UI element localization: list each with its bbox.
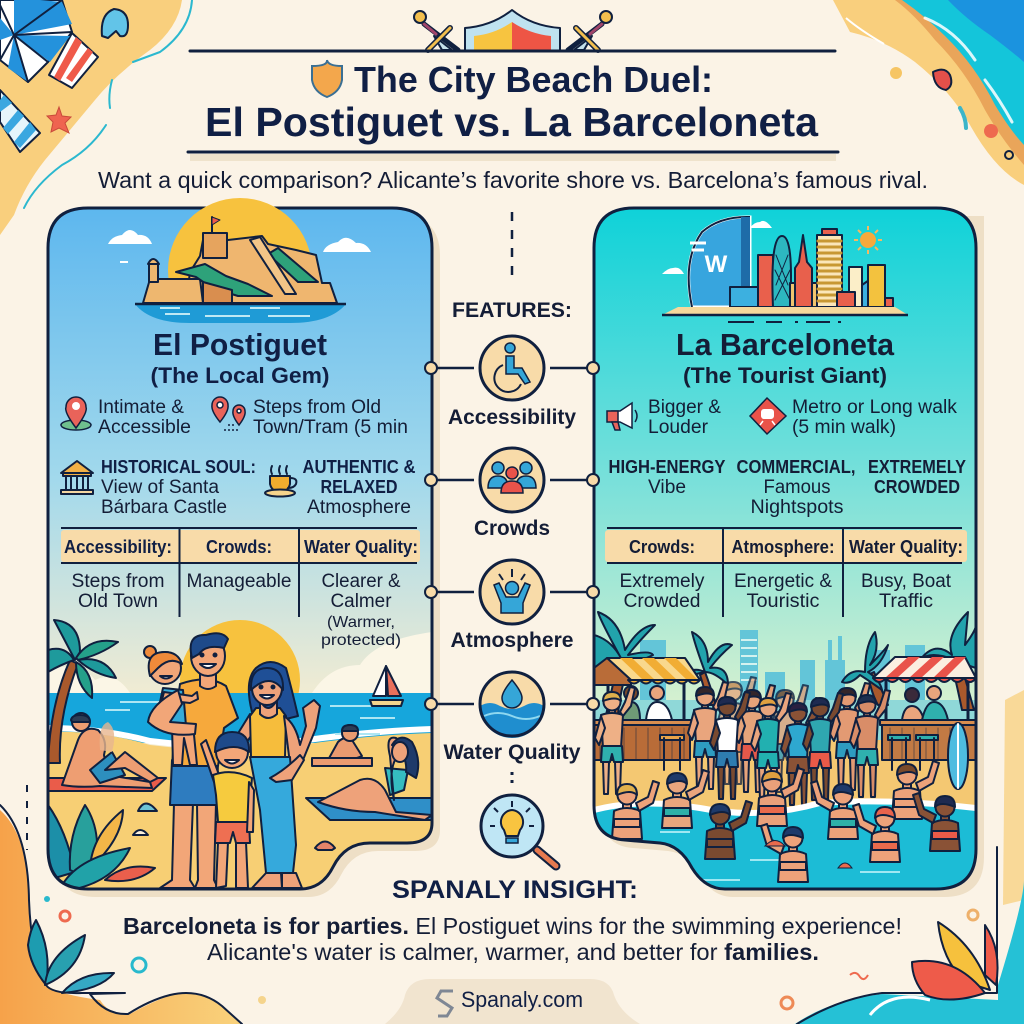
swimmers — [612, 761, 960, 882]
beach bar left — [594, 658, 700, 770]
feature: steps from old town: Town/Tram (5 min — [253, 417, 408, 438]
water and foam — [596, 804, 974, 888]
starfish — [47, 107, 71, 133]
icon: wheelchair — [480, 336, 544, 400]
table: El Postiguet facts: protected) — [321, 632, 401, 649]
decoration: top-left beach corner — [0, 0, 192, 235]
panel outline — [48, 208, 432, 889]
feature: high energy — [608, 456, 726, 498]
icon: small shield — [312, 60, 342, 97]
feature: accessibility: Accessibility — [448, 406, 576, 429]
father — [160, 633, 238, 888]
feature: high energy: Vibe — [648, 477, 686, 498]
table: El Postiguet facts: Old Town — [78, 591, 158, 612]
insight text: Alicante's water is calmer, warmer, and better for families. — [207, 939, 819, 965]
corner leaves — [28, 920, 48, 985]
feature: authentic and relaxed: RELAXED — [320, 476, 398, 497]
castle illustration — [108, 198, 371, 323]
umbrella — [0, 0, 72, 82]
title rule bottom — [188, 152, 838, 161]
panel outline — [594, 208, 976, 889]
sand — [596, 740, 974, 810]
panel heading: El Postiguet — [153, 327, 327, 362]
feature: steps from old town — [212, 397, 408, 438]
feature: commercial — [736, 456, 856, 518]
connectors — [425, 362, 599, 710]
sitting man right — [312, 725, 372, 766]
feature: crowds: Crowds — [474, 517, 550, 540]
table: La Barceloneta facts: Traffic — [879, 591, 933, 612]
feature: crowds — [474, 448, 550, 540]
panel heading — [150, 327, 330, 388]
panel heading: (The Local Gem) — [150, 363, 330, 388]
icon: temple — [61, 461, 93, 494]
panel heading: (The Tourist Giant) — [683, 363, 887, 388]
insight heading: SPANALY INSIGHT: — [392, 876, 638, 904]
skyline illustration — [662, 217, 908, 322]
palm trees — [594, 612, 976, 715]
blue towel — [0, 90, 40, 152]
icon: metro sign — [750, 398, 786, 434]
table: El Postiguet facts — [61, 528, 420, 649]
panel shadow — [602, 216, 984, 897]
dots — [510, 772, 514, 785]
icon: coffee cup — [265, 466, 296, 496]
feature: historical soul — [61, 456, 256, 518]
icon: two pins — [212, 397, 245, 430]
table: El Postiguet facts: Accessibility: — [64, 537, 172, 557]
table: El Postiguet facts: Manageable — [186, 571, 292, 592]
father's arm around girl — [148, 690, 196, 735]
decoration: bottom-right beach corner — [781, 690, 1024, 1024]
feature: extremely crowded: EXTREMELY — [868, 456, 967, 477]
palm tree — [48, 620, 118, 763]
feature: authentic and relaxed: Atmosphere — [307, 497, 411, 518]
table: El Postiguet facts: Calmer — [330, 591, 392, 612]
jellyfish shell — [102, 9, 128, 38]
crowded beach scene — [594, 612, 976, 900]
feature: extremely crowded: CROWDED — [874, 476, 960, 497]
icon: map pin — [61, 397, 91, 430]
feature: metro or long walk — [750, 397, 958, 438]
panel background — [48, 208, 432, 889]
top emblem: crossed swords and shield — [414, 10, 612, 51]
table: La Barceloneta facts: Energetic & — [734, 571, 832, 592]
feature: water quality — [444, 672, 581, 764]
woman on towel — [306, 798, 432, 820]
insight text: Barceloneta is for parties. El Postiguet wins for the swimming experience! — [123, 913, 902, 939]
feature: intimate and accessible: Intimate & — [98, 397, 184, 418]
feature: commercial: COMMERCIAL, — [736, 456, 856, 477]
table: La Barceloneta facts: Touristic — [746, 591, 820, 612]
footer brand pill — [385, 979, 640, 1024]
icon: cheering person — [480, 560, 544, 624]
sunbather left — [48, 778, 166, 791]
feature: metro or long walk: (5 min walk) — [792, 417, 896, 438]
mother — [237, 662, 320, 888]
skyline illustration: W — [705, 251, 728, 278]
feature: water quality: Water Quality — [444, 741, 581, 764]
feature: historical soul: View of Santa — [101, 477, 219, 498]
feature: bigger and louder: Louder — [648, 417, 709, 438]
feature: bigger and louder: Bigger & — [648, 397, 721, 418]
feature: accessibility — [448, 336, 576, 429]
decoration: bottom-left beach corner — [0, 785, 266, 1024]
title line 2: El Postiguet vs. La Barceloneta — [205, 99, 819, 145]
table: La Barceloneta facts: Crowds: — [629, 537, 695, 557]
table: El Postiguet facts: Water Quality: — [304, 537, 418, 557]
feature: historical soul: HISTORICAL SOUL: — [101, 456, 256, 477]
feature: historical soul: Bárbara Castle — [101, 497, 227, 518]
feature: extremely crowded — [868, 456, 967, 497]
feature: intimate and accessible — [61, 397, 191, 438]
icon: megaphone — [607, 403, 637, 430]
sailboat — [373, 666, 386, 696]
title line 1: The City Beach Duel: — [354, 59, 713, 100]
table: El Postiguet facts: (Warmer, — [327, 614, 395, 631]
striped towel — [49, 33, 98, 88]
decoration: top-right beach corner — [833, 0, 1024, 185]
feature: metro or long walk: Metro or Long walk — [792, 397, 958, 418]
center dashed line — [511, 212, 513, 282]
little girl on father's arm — [144, 646, 198, 765]
table: La Barceloneta facts: Busy, Boat — [861, 571, 952, 592]
beach plants — [48, 805, 155, 889]
table: La Barceloneta facts: Crowded — [624, 591, 700, 612]
crowd on the sand — [595, 677, 890, 805]
feature: steps from old town: Steps from Old — [253, 397, 381, 418]
panel heading: La Barceloneta — [676, 327, 895, 362]
feature: authentic and relaxed — [265, 456, 416, 518]
boy — [201, 732, 254, 888]
table: El Postiguet facts: Crowds: — [206, 537, 272, 557]
subtitle: Want a quick comparison? Alicante’s favorite shore vs. Barcelona’s famous rival. — [98, 167, 928, 193]
feature: authentic and relaxed: AUTHENTIC & — [302, 456, 416, 477]
panel background — [594, 208, 976, 889]
table: El Postiguet facts: Clearer & — [322, 571, 401, 592]
shells on sand — [133, 804, 335, 850]
beach bar right — [873, 657, 976, 789]
bobbing heads — [765, 840, 852, 868]
insight text — [123, 913, 902, 965]
feature: high energy: HIGH-ENERGY — [608, 456, 726, 477]
icon: Spanaly logo — [437, 991, 453, 1016]
panel: La Barceloneta — [594, 208, 984, 900]
title block — [205, 59, 819, 145]
title rule top — [190, 50, 835, 52]
panel: El Postiguet — [48, 198, 440, 900]
panel shadow — [56, 216, 440, 897]
feature: atmosphere: Atmosphere — [450, 629, 574, 652]
panel heading — [676, 327, 895, 388]
table: La Barceloneta facts — [605, 528, 967, 617]
footer brand pill: Spanaly.com — [461, 987, 583, 1012]
feature: intimate and accessible: Accessible — [98, 417, 191, 438]
features heading: FEATURES: — [452, 299, 572, 322]
beach family scene — [48, 620, 432, 900]
feature: commercial: Nightspots — [750, 497, 844, 518]
table: La Barceloneta facts: Extremely — [620, 571, 705, 592]
background skyline — [640, 630, 925, 700]
feature: atmosphere — [450, 560, 574, 652]
table: La Barceloneta facts: Water Quality: — [849, 537, 963, 557]
feature: bigger and louder — [607, 397, 721, 438]
feature: commercial: Famous — [764, 477, 830, 498]
icon: water drop and waves — [480, 672, 544, 738]
icon: three people — [480, 448, 544, 512]
table: El Postiguet facts: Steps from — [72, 571, 164, 592]
table: La Barceloneta facts: Atmosphere: — [732, 537, 834, 557]
icon: lightbulb with magnifier — [481, 795, 556, 866]
